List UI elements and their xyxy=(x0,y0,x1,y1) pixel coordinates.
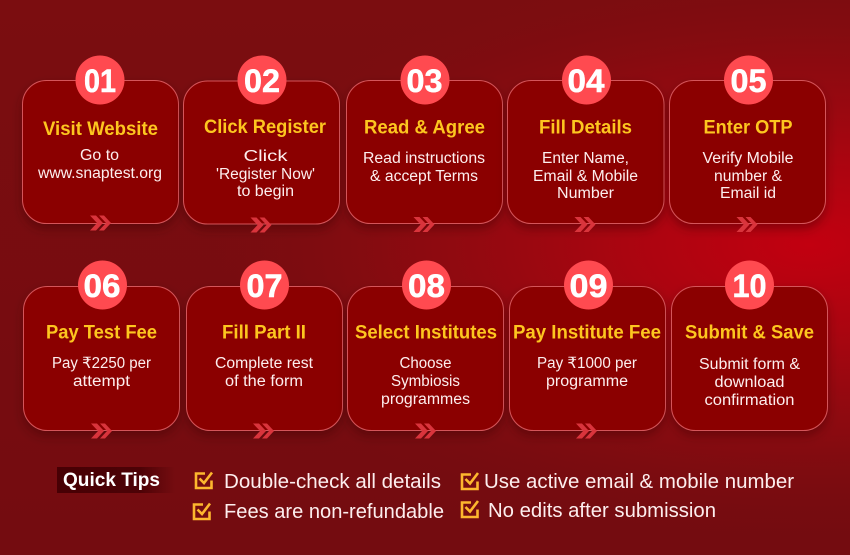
step 06 number badge xyxy=(78,260,127,310)
step 05 title: Enter OTP xyxy=(704,118,793,138)
step 02 number badge xyxy=(238,56,286,104)
step 03 description: & accept Terms xyxy=(370,168,478,185)
step 05 description: number & xyxy=(714,168,783,185)
step 08 description xyxy=(381,355,470,408)
step 01 description: www.snaptest.org xyxy=(37,165,162,182)
step 06 number badge: 06 xyxy=(84,268,120,304)
step 07 description xyxy=(215,355,314,390)
step 05 number badge: 05 xyxy=(730,63,766,99)
step 02 card xyxy=(184,56,340,232)
step 03 card xyxy=(346,56,502,232)
tip: double-check all details: Double-check all details xyxy=(224,470,441,493)
step 09 description: programme xyxy=(546,373,628,390)
step 01 card xyxy=(22,56,178,230)
step 04 number badge xyxy=(562,56,611,104)
step 04 description xyxy=(533,150,638,202)
tip: no edits after submission: No edits after submission xyxy=(488,499,716,522)
step 09 title: Pay Institute Fee xyxy=(513,322,661,344)
step 07 card xyxy=(186,260,342,438)
step 03 description: Read instructions xyxy=(363,150,485,167)
step 10 description: Submit form & xyxy=(699,356,801,373)
step 04 description: Enter Name, xyxy=(542,150,629,167)
step 09 number badge: 09 xyxy=(570,268,608,304)
step 01 title: Visit Website xyxy=(43,119,158,140)
step 01 description xyxy=(37,147,162,182)
step 01 arrow xyxy=(90,216,111,230)
step 10 title: Submit & Save xyxy=(685,322,814,344)
step 08 description: Symbiosis xyxy=(391,373,460,390)
step 07 number badge: 07 xyxy=(246,268,282,304)
step 08 number badge xyxy=(402,260,451,310)
step 02 description xyxy=(216,148,315,200)
step 02 description: 'Register Now' xyxy=(216,166,315,183)
step 08 description: Choose xyxy=(400,355,452,372)
step 02 description: Click xyxy=(244,148,288,165)
tip: fees are non-refundable: Fees are non-refundable xyxy=(224,500,444,523)
step 04 card xyxy=(508,56,664,232)
step 04 description: Number xyxy=(557,185,614,202)
quick tips label: Quick Tips xyxy=(63,470,160,491)
step 09 description: Pay ₹1000 per xyxy=(537,355,637,372)
step 01 number badge: 01 xyxy=(84,63,116,99)
step 09 card xyxy=(510,260,666,438)
step 05 arrow xyxy=(736,217,758,232)
step 06 arrow xyxy=(91,424,112,438)
step 06 title: Pay Test Fee xyxy=(46,322,157,344)
step 07 arrow xyxy=(253,424,274,438)
step 04 title: Fill Details xyxy=(539,118,632,138)
step 04 arrow xyxy=(574,217,596,232)
step 10 number badge: 10 xyxy=(732,268,766,304)
step 02 number badge: 02 xyxy=(244,63,280,99)
step 03 number badge: 03 xyxy=(406,63,442,99)
step 07 description: Complete rest xyxy=(215,355,314,372)
step 04 description: Email & Mobile xyxy=(533,168,638,185)
step 09 description xyxy=(537,355,637,390)
step 09 arrow xyxy=(576,424,597,438)
step 08 number badge: 08 xyxy=(408,268,445,304)
step 08 description: programmes xyxy=(381,391,470,408)
step 07 number badge xyxy=(240,260,289,310)
step 07 title: Fill Part II xyxy=(222,322,306,344)
step 06 description xyxy=(52,355,151,390)
step 02 arrow xyxy=(250,218,272,232)
quick tips label xyxy=(57,467,175,493)
step 01 description: Go to xyxy=(80,147,119,164)
step 02 title: Click Register xyxy=(204,117,327,138)
step 07 description: of the form xyxy=(225,373,303,390)
step 10 number badge xyxy=(725,260,774,310)
step 05 card xyxy=(670,56,826,232)
step 10 description xyxy=(699,356,801,409)
step 08 arrow xyxy=(415,424,436,438)
step 03 arrow xyxy=(414,217,434,232)
step 06 card xyxy=(24,260,180,438)
step 03 description xyxy=(363,150,485,185)
tip: use active email and mobile number: Use active email & mobile number xyxy=(484,470,794,493)
step 08 title: Select Institutes xyxy=(355,322,497,344)
step 05 number badge xyxy=(724,56,773,104)
step 04 number badge: 04 xyxy=(568,63,605,99)
step 03 number badge xyxy=(400,56,450,104)
step 05 description: Verify Mobile xyxy=(702,150,794,167)
step 06 description: Pay ₹2250 per xyxy=(52,355,151,372)
step 01 number badge xyxy=(76,56,124,104)
step 09 number badge xyxy=(564,260,613,310)
step 02 description: to begin xyxy=(237,183,294,200)
step 06 description: attempt xyxy=(73,373,131,390)
step 05 description xyxy=(702,150,794,202)
step 10 card xyxy=(672,260,828,430)
step 05 description: Email id xyxy=(720,185,776,202)
step 10 description: confirmation xyxy=(704,392,794,409)
step 03 title: Read & Agree xyxy=(364,118,485,138)
step 08 card xyxy=(348,260,504,438)
step 10 description: download xyxy=(714,374,784,391)
